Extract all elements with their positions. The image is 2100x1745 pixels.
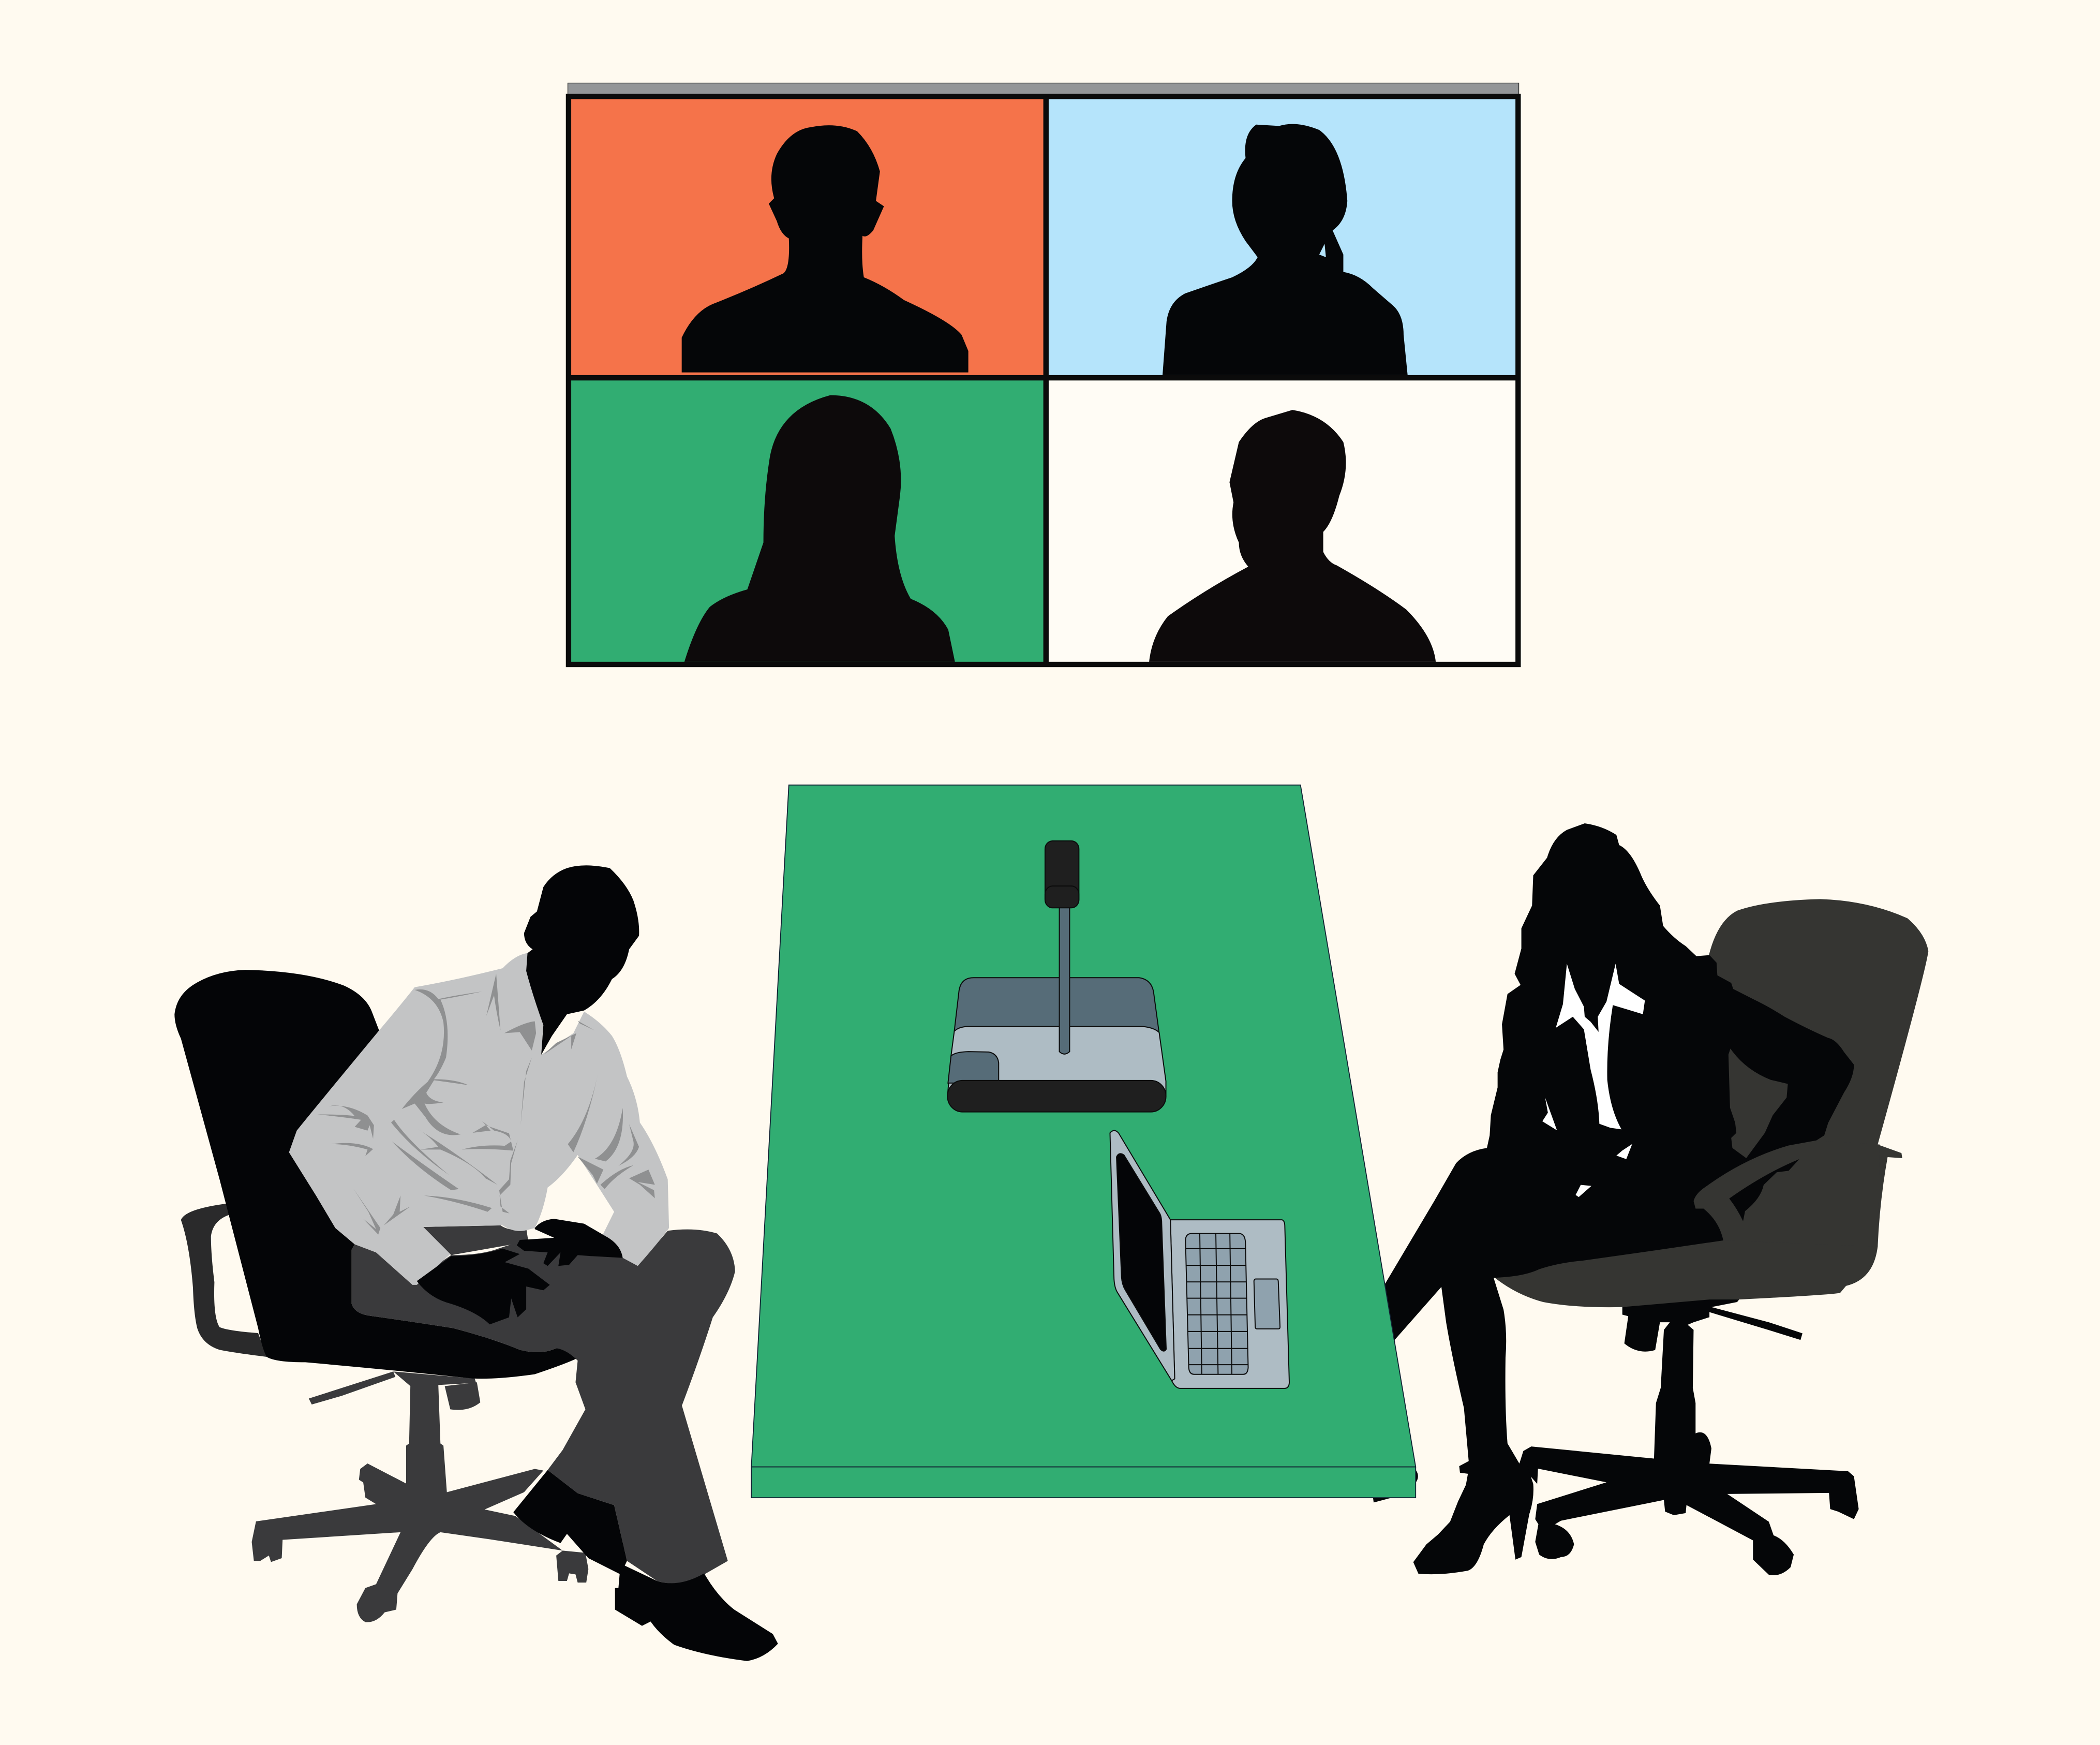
screen frame	[568, 96, 1519, 664]
table	[751, 785, 1416, 1498]
table top	[751, 785, 1416, 1467]
conference base pad	[948, 1052, 999, 1083]
laptop base	[1170, 1220, 1289, 1388]
right figure: woman on office chair	[1369, 823, 1928, 1575]
head and neck	[524, 865, 639, 1055]
panel: blue caller	[1047, 98, 1516, 376]
panel: green caller	[571, 379, 1045, 663]
microphone head	[1045, 841, 1079, 908]
hands	[417, 1219, 623, 1324]
trousers	[352, 1225, 735, 1584]
panel: orange caller	[571, 98, 1045, 376]
laptop trackpad	[1254, 1279, 1280, 1329]
table front edge	[751, 1467, 1416, 1498]
chair base	[252, 1371, 588, 1622]
chair armrest	[181, 1204, 267, 1357]
left figure: man on office chair	[174, 865, 778, 1661]
laptop keyboard	[1185, 1234, 1248, 1374]
conference device and laptop	[947, 841, 1289, 1388]
panel: white caller	[1047, 379, 1516, 663]
conference base top	[947, 1027, 1166, 1096]
shadow under armrest	[1729, 1159, 1799, 1221]
far shoe behind table	[1373, 1470, 1418, 1502]
gap between arm and torso	[1729, 1048, 1788, 1158]
laptop screen	[1116, 1154, 1166, 1351]
conference base front	[947, 1081, 1166, 1112]
shoes	[513, 1470, 778, 1661]
silhouette: long-haired woman in green panel	[684, 395, 955, 662]
chair base	[1520, 1299, 1859, 1575]
chair back and seat	[1494, 899, 1928, 1307]
screen top bar	[568, 83, 1519, 96]
chair armrest	[1693, 1141, 1880, 1247]
microphone pole	[1060, 906, 1069, 1054]
silhouette: woman in blue panel	[1163, 124, 1408, 375]
silhouette: man in orange panel	[682, 125, 969, 373]
silhouette: man in white panel	[1149, 410, 1436, 662]
white blouse	[1542, 964, 1645, 1197]
conference base rear	[954, 978, 1159, 1033]
video wall screen	[568, 83, 1519, 664]
ponytail gap	[1319, 244, 1326, 257]
shirt	[289, 953, 669, 1285]
shirt folds	[317, 973, 655, 1235]
laptop lid	[1110, 1131, 1175, 1381]
chair back and seat	[174, 970, 578, 1379]
woman silhouette	[1369, 823, 1854, 1574]
